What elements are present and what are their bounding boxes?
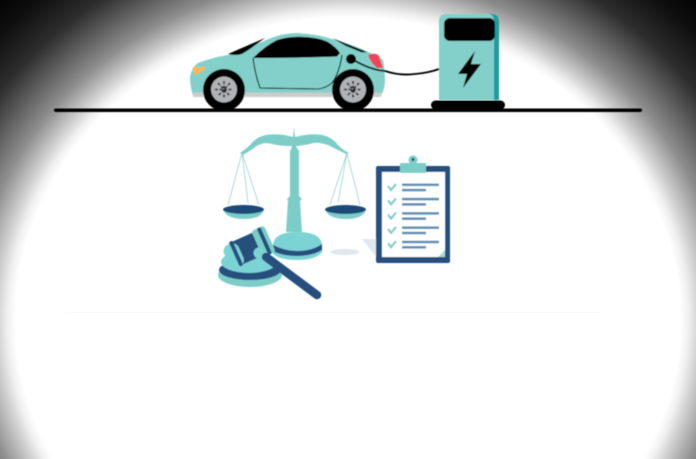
faint divider <box>65 312 600 313</box>
ground line <box>54 108 642 112</box>
rear wheel <box>332 69 374 111</box>
scales of justice <box>223 127 366 260</box>
clipboard checklist <box>376 156 450 263</box>
shadow under clipboard <box>362 239 377 258</box>
small ellipse shadow <box>330 249 360 255</box>
car <box>190 33 439 111</box>
illustration: electric car charging <box>54 14 642 112</box>
front wheel <box>203 69 245 111</box>
charging station <box>431 14 505 110</box>
gavel <box>218 225 317 295</box>
illustration: law scales, gavel and checklist <box>218 127 450 295</box>
checklist rows <box>388 184 439 249</box>
